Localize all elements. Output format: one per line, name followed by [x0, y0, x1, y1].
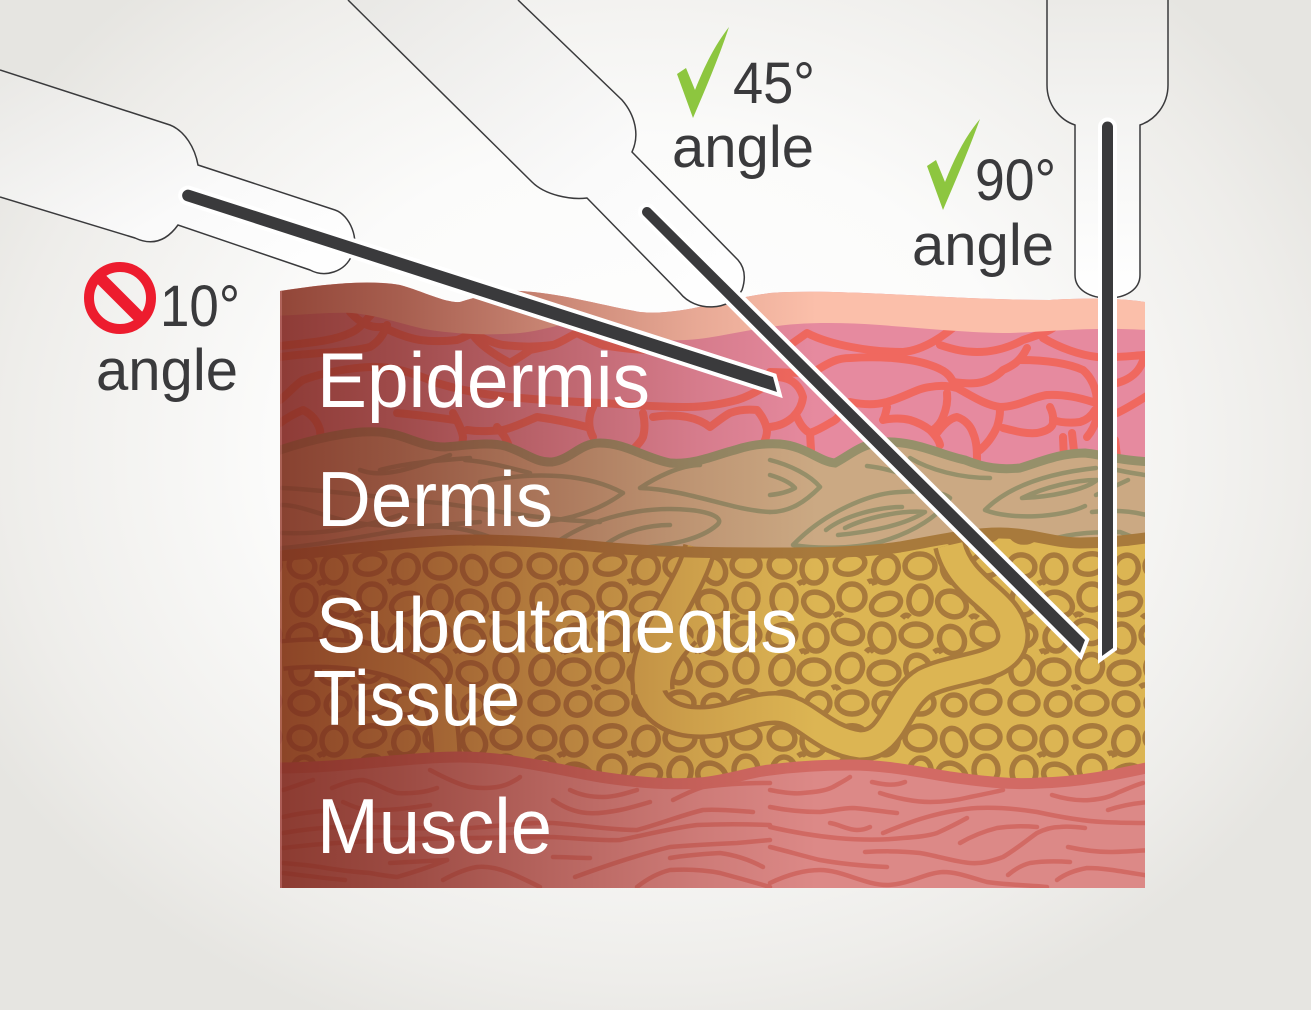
angle label: 10 degrees — [96, 274, 240, 403]
layer: subcutaneous fat — [270, 533, 1160, 800]
angle label: 45 degrees: 45° — [733, 51, 815, 116]
fat top boundary — [270, 533, 1160, 557]
muscle fibres — [283, 770, 1150, 887]
label: Epidermis: Epidermis — [317, 336, 650, 424]
syringe: 90 degree — [1047, 0, 1168, 298]
angle label: 90 degrees: angle — [912, 213, 1054, 278]
needle: 90 degree — [1102, 122, 1113, 656]
syringe: 10 degree — [0, 70, 355, 274]
label: Tissue: Tissue — [313, 654, 520, 742]
angle label: 45 degrees: angle — [672, 115, 814, 180]
needle: 45 degree — [642, 207, 1085, 653]
angle label: 90 degrees — [912, 148, 1056, 278]
fat channel: main — [647, 545, 1013, 745]
left tone overlay — [280, 282, 772, 888]
syringe: 45 degree — [348, 0, 744, 307]
fat channel: left — [282, 653, 447, 775]
icon: check mark 90 — [927, 119, 980, 210]
icon: check mark 45 — [677, 27, 729, 118]
angle label: 45 degrees — [672, 51, 815, 180]
epidermis blood vessels — [280, 310, 1150, 465]
angle label: 10 degrees: 10° — [160, 274, 240, 339]
label: Dermis: Dermis — [317, 455, 553, 543]
panel: skin cross-section — [270, 260, 1160, 900]
angle label: 10 degrees: angle — [96, 338, 238, 403]
layer: skin surface — [280, 282, 1145, 340]
left edge highlight — [280, 270, 282, 890]
angle label: 90 degrees: 90° — [975, 148, 1056, 213]
needle: 10 degree — [182, 190, 777, 392]
icon: prohibited sign — [89, 267, 151, 329]
label: Subcutaneous: Subcutaneous — [316, 581, 798, 669]
layer: dermis — [280, 427, 1145, 550]
layer: muscle — [270, 757, 1160, 900]
label: Muscle: Muscle — [317, 782, 552, 870]
layer: epidermis — [280, 282, 1145, 464]
dermis fibres — [282, 455, 1150, 548]
